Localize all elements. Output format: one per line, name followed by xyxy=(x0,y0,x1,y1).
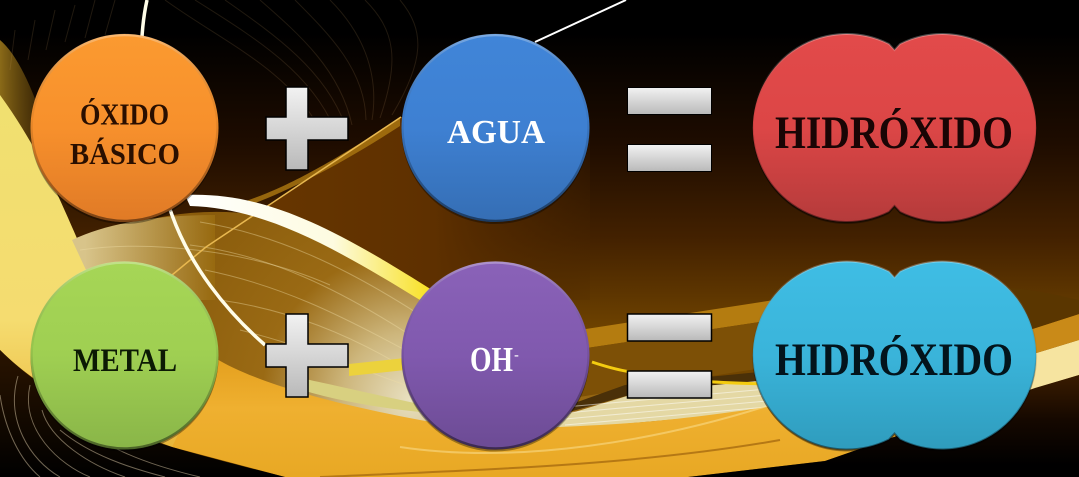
bubble: hidróxido cyan: HIDRÓXIDO xyxy=(775,334,1013,386)
bubble: hidróxido cyan xyxy=(753,262,1036,452)
circle: metal xyxy=(30,262,218,452)
circle: agua xyxy=(402,34,590,224)
circle: óxido básico xyxy=(30,34,218,224)
panel: oxide plus water equals hydroxide xyxy=(30,34,1036,224)
white arc xyxy=(141,0,265,345)
circle: óxido básico: ÓXIDO xyxy=(80,96,169,132)
icon: plus xyxy=(266,87,348,170)
bubble: hidróxido red xyxy=(753,34,1036,224)
bubble: hidróxido red: HIDRÓXIDO xyxy=(775,107,1013,159)
circle: metal: METAL xyxy=(73,343,177,379)
white swoosh band xyxy=(185,195,432,300)
diagonal thin line xyxy=(172,0,626,275)
circle: OH-: OH xyxy=(470,340,513,379)
icon: plus xyxy=(266,314,348,397)
panel: metal plus hydroxyl equals hydroxide xyxy=(30,262,1036,452)
circle: agua: AGUA xyxy=(447,114,545,151)
circle: OH-: - xyxy=(514,348,519,363)
icon: equals xyxy=(628,88,712,172)
circle: OH- xyxy=(402,262,590,452)
circle: óxido básico: BÁSICO xyxy=(70,136,180,171)
icon: equals xyxy=(628,314,712,398)
